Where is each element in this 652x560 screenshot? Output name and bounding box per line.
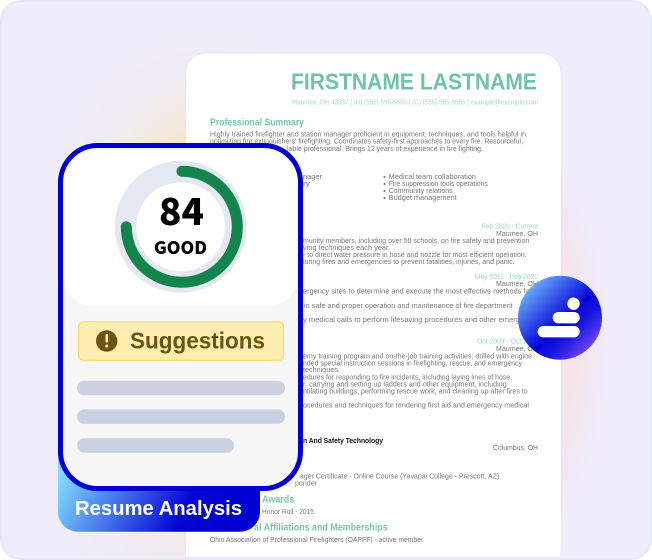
score number: 84 — [159, 182, 204, 236]
work entry 3: Maumee, OH — [496, 344, 538, 353]
certifications — [295, 472, 499, 488]
certifications: ager Certificate - Online Course (Yavapai College - Prescott, AZ) — [300, 472, 499, 481]
icon: logo badge — [518, 276, 602, 360]
work entry 3: techniques. — [303, 365, 340, 374]
suggestions banner — [78, 322, 284, 360]
awards — [262, 495, 314, 516]
resume contact line: Maumee, OH 43537 | (H) (555) 555-5555 | (C) (555) 555-5555 | example@example.com — [292, 100, 538, 107]
work entry 3: nded special instruction sessions in firefighting, rescue, and emergency — [303, 359, 522, 368]
resume name: FIRSTNAME LASTNAME — [291, 68, 537, 94]
skills list: ry — [303, 179, 310, 188]
affiliations: al Affiliations and Memberships — [254, 523, 388, 534]
work entry 1: ving techniques each year. — [303, 243, 390, 252]
work entry 1: - to direct water pressure in hose and nozzle for most efficient operation. — [303, 250, 527, 259]
badge: resume analysis label: Resume Analysis — [75, 497, 242, 520]
work entry 3: ntilating buildings, performing rescue work, and cleaning up after fires to — [303, 387, 528, 396]
work entry 1: Feb 2020 - Current — [482, 222, 538, 231]
professional summary heading: Professional Summary — [210, 117, 304, 128]
awards: Awards — [262, 495, 295, 506]
work entry 2: May 2011 - Feb 2020 — [475, 272, 538, 281]
professional summary text: Highly trained firefighter and station manager proficient in equipment, techniques, and tools helpful in — [210, 130, 526, 139]
affiliations: Ohio Association of Professional Firefighters (OAPFF) - active member — [210, 535, 424, 544]
work entry 1: Maumee, OH — [496, 229, 538, 238]
skills list: Fire suppression tools operations — [389, 179, 488, 188]
work entry 1 — [303, 222, 538, 266]
work entry 3 — [303, 336, 538, 410]
work entry 1: munity members, including over 50 schools, on fire safety and prevention — [303, 236, 529, 245]
work entry 2 — [303, 272, 538, 324]
score area — [63, 150, 298, 306]
education entry: n And Safety Technology — [303, 436, 384, 445]
work entry 2: y medical calls to perform lifesaving procedures and other emergency — [303, 315, 536, 324]
panel: score card — [60, 146, 300, 488]
work entry 3: edures for responding to fire incidents, including laying lines of hose, — [303, 373, 512, 382]
work entry 2: Maumee, OH — [496, 279, 538, 288]
affiliations — [210, 523, 424, 544]
work entry 3: ocedures and techniques for rendering first aid and emergency medical — [303, 401, 529, 410]
professional summary text — [210, 130, 526, 153]
work entry 3: r, carrying and setting up ladders and other equipment, including — [303, 380, 507, 389]
professional summary text: optimizing fire extinguishers' firefighting. Coordinates safety-first approaches to every fire. Resourceful, — [210, 137, 523, 146]
work entry 3: Oct 2009 - Oct 2011 — [477, 336, 538, 346]
skills list: nager — [303, 172, 323, 181]
work entry 2: ergency sites to determine and execute the most effective methods for — [303, 287, 533, 296]
skills list: Budget management — [389, 193, 457, 202]
work entry 1: luring fires and emergencies to prevent fatalities, injuries, and panic. — [303, 257, 515, 266]
skills list — [303, 172, 488, 202]
icon: exclamation — [96, 330, 117, 352]
score gauge — [126, 171, 237, 282]
suggestions banner: Suggestions — [130, 328, 265, 354]
work entry 2: in safe and proper operation and maintenance of fire department — [304, 301, 513, 310]
skills list: Medical team collaboration — [389, 172, 476, 181]
placeholder lines — [77, 381, 285, 453]
education entry: Columbus, OH — [493, 443, 538, 452]
badge: resume analysis label — [58, 440, 260, 532]
work entry 3: emy training program and on-the-job training activities; drilled with engine — [303, 351, 532, 360]
score rating: GOOD — [154, 235, 207, 260]
education entry — [303, 436, 538, 452]
professional summary text: lable professional. Brings 12 years of experience in fire fighting. — [287, 144, 483, 153]
skills list: Community relations — [389, 186, 453, 195]
panel: resume document — [186, 53, 561, 560]
certifications: ponder — [295, 479, 318, 488]
awards: Honor Roll - 2015 — [262, 507, 314, 516]
